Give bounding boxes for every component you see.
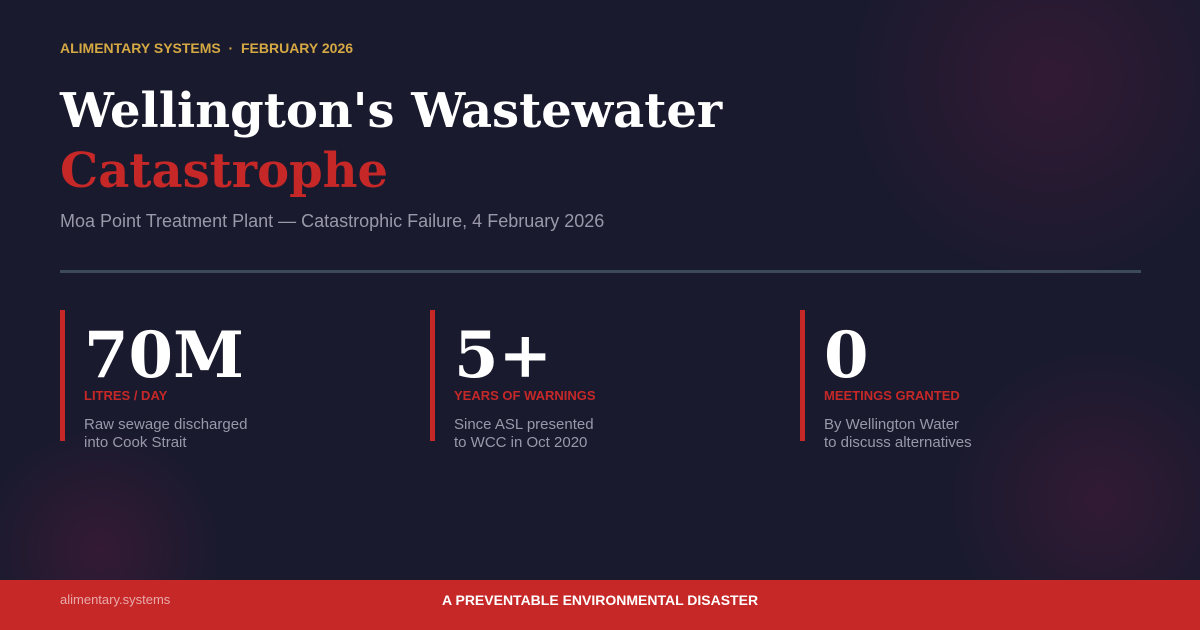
background glow: bottom left <box>0 430 220 580</box>
stat description: into Cook Strait <box>84 434 187 451</box>
stat label: YEARS OF WARNINGS <box>454 388 596 403</box>
footer tagline: A PREVENTABLE ENVIRONMENTAL DISASTER <box>442 592 758 608</box>
footer url: alimentary.systems <box>60 592 170 607</box>
stat description: Since ASL presented <box>454 416 594 433</box>
background glow: bottom right <box>950 350 1200 580</box>
stat label: MEETINGS GRANTED <box>824 388 960 403</box>
stat description <box>454 416 594 451</box>
title <box>60 83 723 199</box>
stat: litres per day <box>60 310 247 451</box>
stat description <box>84 416 247 451</box>
stat description: Raw sewage discharged <box>84 416 247 433</box>
title: Wellington's Wastewater <box>60 83 722 139</box>
background glow: top right <box>850 0 1200 280</box>
subtitle: Moa Point Treatment Plant — Catastrophic Failure, 4 February 2026 <box>60 211 604 231</box>
stat description: By Wellington Water <box>824 416 959 433</box>
stat number: 0 <box>824 318 869 393</box>
divider <box>60 270 1141 273</box>
stat label: LITRES / DAY <box>84 388 167 403</box>
footer band <box>0 580 1200 630</box>
title: Catastrophe <box>60 143 388 199</box>
stat description: to discuss alternatives <box>824 434 972 451</box>
stat: years of warnings <box>430 310 596 451</box>
stat: meetings granted <box>800 310 972 451</box>
stat description: to WCC in Oct 2020 <box>454 434 587 451</box>
stat number: 70M <box>84 318 244 393</box>
eyebrow: ALIMENTARY SYSTEMS · FEBRUARY 2026 <box>60 40 353 56</box>
stat description <box>824 416 972 451</box>
stat number: 5+ <box>454 318 552 393</box>
